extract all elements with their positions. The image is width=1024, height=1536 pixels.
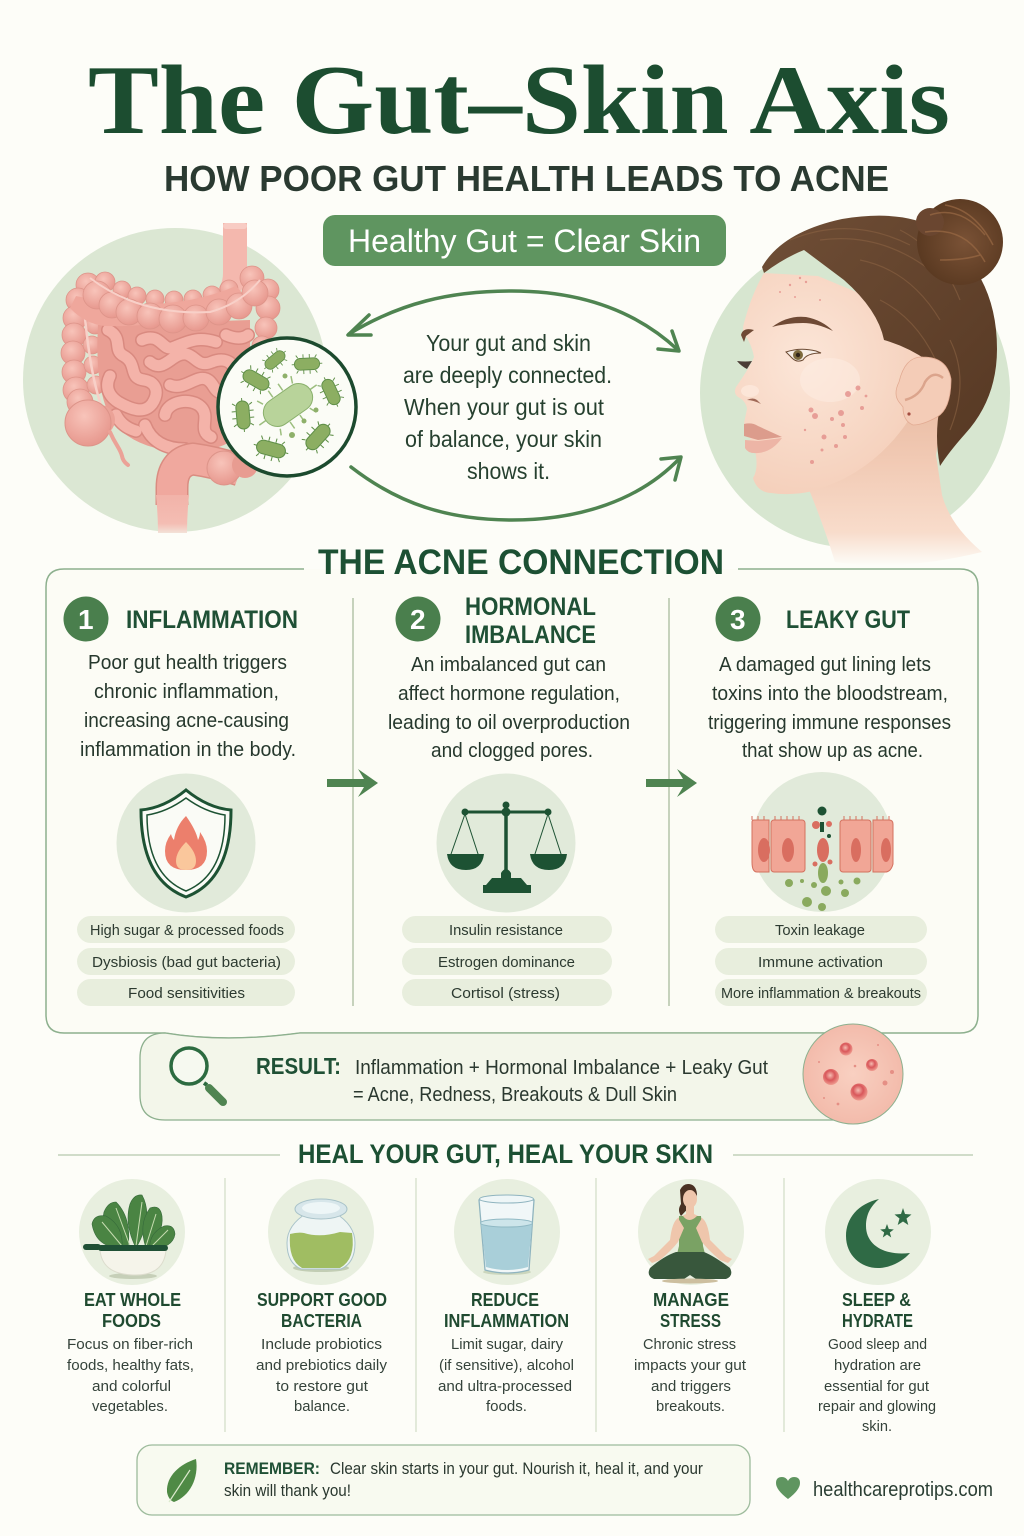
- tip: reduce inflammation: foods.: [486, 1398, 527, 1415]
- column 3: leaky gut: that show up as acne.: [742, 740, 923, 762]
- tip: support good bacteria: [256, 1179, 387, 1415]
- column 3: leaky gut: Toxin leakage: [775, 922, 865, 939]
- column 3: leaky gut: Immune activation: [758, 954, 883, 971]
- tip: manage stress: STRESS: [660, 1311, 721, 1331]
- connection text: of balance, your skin: [405, 426, 602, 452]
- tip: support good bacteria: BACTERIA: [281, 1311, 362, 1331]
- column 2: hormonal imbalance: Insulin resistance: [449, 922, 563, 939]
- column 2: hormonal imbalance: leading to oil overproduction: [388, 712, 630, 734]
- badge: healthy gut equals clear skin: [323, 215, 726, 266]
- column 3: leaky gut: LEAKY GUT: [786, 606, 910, 634]
- tip: eat whole foods: vegetables.: [92, 1398, 168, 1415]
- icon: magnifying glass: [171, 1048, 223, 1102]
- tip: support good bacteria: to restore gut: [276, 1378, 369, 1395]
- tip: sleep and hydrate: hydration are: [834, 1357, 921, 1374]
- connection text: [403, 330, 612, 484]
- tip: manage stress: breakouts.: [656, 1398, 725, 1415]
- column 3: leaky gut: [708, 596, 951, 1006]
- column 2: hormonal imbalance: 2: [410, 604, 426, 635]
- tip: eat whole foods: [67, 1179, 194, 1415]
- connection text: shows it.: [467, 458, 550, 484]
- callout: remember: REMEMBER:: [224, 1459, 320, 1478]
- tip: support good bacteria: SUPPORT GOOD: [257, 1290, 387, 1310]
- connection text: are deeply connected.: [403, 362, 612, 388]
- column 1: inflammation: High sugar & processed foods: [90, 922, 284, 939]
- column 3: leaky gut: More inflammation & breakouts: [721, 985, 921, 1002]
- column 1: inflammation: Poor gut health triggers: [88, 652, 287, 674]
- callout: remember: [137, 1445, 750, 1515]
- icon: leaf: [167, 1459, 197, 1502]
- column 3: leaky gut: triggering immune responses: [708, 712, 951, 734]
- column 2: hormonal imbalance: Estrogen dominance: [438, 954, 575, 971]
- tip: eat whole foods: FOODS: [102, 1311, 161, 1331]
- tip: sleep and hydrate: HYDRATE: [842, 1311, 913, 1331]
- tip: sleep and hydrate: essential for gut: [824, 1378, 930, 1395]
- tip: manage stress: MANAGE: [653, 1290, 729, 1310]
- tip: reduce inflammation: (if sensitive), alcohol: [439, 1357, 574, 1374]
- illustration: woman's face in profile with acne: [700, 199, 1010, 565]
- tip: sleep and hydrate: Good sleep and: [828, 1336, 927, 1353]
- column 3: leaky gut: 3: [730, 604, 746, 635]
- subtitle: HOW POOR GUT HEALTH LEADS TO ACNE: [164, 158, 889, 199]
- icon: probiotic jar: [287, 1199, 355, 1272]
- column 1: inflammation: 1: [78, 604, 94, 635]
- title: The Gut–Skin Axis: [88, 46, 950, 155]
- arrow: bottom curved: [351, 457, 681, 520]
- callout: remember: Clear skin starts in your gut. Nourish it, heal it, and your: [330, 1459, 703, 1478]
- tip: eat whole foods: Focus on fiber-rich: [67, 1336, 193, 1353]
- icon: skin with pimples: [803, 1024, 903, 1124]
- section heading: the acne connection: THE ACNE CONNECTION: [318, 543, 724, 582]
- tip: sleep and hydrate: skin.: [862, 1418, 892, 1435]
- illustration: digestive tract with bacteria: [23, 223, 356, 533]
- icon: moon and stars: [846, 1199, 912, 1268]
- tip: support good bacteria: balance.: [294, 1398, 350, 1415]
- icon: leafy greens in bowl: [83, 1195, 175, 1279]
- tip: sleep and hydrate: [818, 1179, 936, 1435]
- column 1: inflammation: Food sensitivities: [128, 985, 245, 1002]
- tip: eat whole foods: EAT WHOLE: [84, 1290, 181, 1310]
- tip: support good bacteria: and prebiotics daily: [256, 1357, 387, 1374]
- column 1: inflammation: inflammation in the body.: [80, 739, 296, 761]
- tip: sleep and hydrate: repair and glowing: [818, 1398, 936, 1415]
- panel: acne connection: [46, 569, 978, 1038]
- callout: result: Inflammation + Hormonal Imbalance + Leaky Gut: [355, 1057, 768, 1079]
- tip: manage stress: [634, 1179, 747, 1415]
- tip: reduce inflammation: Limit sugar, dairy: [451, 1336, 563, 1353]
- column 2: hormonal imbalance: IMBALANCE: [465, 621, 596, 649]
- section heading: heal your gut: HEAL YOUR GUT, HEAL YOUR SKIN: [298, 1139, 713, 1169]
- column 2: hormonal imbalance: An imbalanced gut can: [411, 654, 606, 676]
- column 3: leaky gut: toxins into the bloodstream,: [712, 683, 948, 705]
- icon: meditating woman: [648, 1184, 732, 1284]
- tip: support good bacteria: Include probiotics: [261, 1336, 382, 1353]
- tip: reduce inflammation: and ultra-processed: [438, 1378, 572, 1395]
- callout: result: [140, 1024, 903, 1124]
- column 1: inflammation: INFLAMMATION: [126, 606, 298, 634]
- tip: manage stress: impacts your gut: [634, 1357, 747, 1374]
- callout: result: RESULT:: [256, 1053, 341, 1079]
- column 2: hormonal imbalance: [388, 593, 630, 1006]
- column 1: inflammation: Dysbiosis (bad gut bacteria): [92, 954, 281, 971]
- badge: healthy gut equals clear skin: Healthy Gut = Clear Skin: [348, 223, 701, 259]
- website: healthcareprotips.com: [813, 1479, 993, 1501]
- tip: manage stress: and triggers: [651, 1378, 731, 1395]
- tip: reduce inflammation: REDUCE: [471, 1290, 539, 1310]
- column 2: hormonal imbalance: and clogged pores.: [431, 740, 593, 762]
- connection text: Your gut and skin: [426, 330, 591, 356]
- column 1: inflammation: increasing acne-causing: [84, 710, 289, 732]
- column 2: hormonal imbalance: affect hormone regulation,: [398, 683, 620, 705]
- column 2: hormonal imbalance: Cortisol (stress): [451, 985, 560, 1002]
- icon: heart: [776, 1477, 800, 1499]
- arrow: step 2 to 3: [646, 769, 697, 797]
- arrow: step 1 to 2: [327, 769, 378, 797]
- tip: sleep and hydrate: SLEEP &: [842, 1290, 911, 1310]
- column 3: leaky gut: A damaged gut lining lets: [719, 654, 931, 676]
- connection text: When your gut is out: [404, 394, 605, 420]
- callout: result: = Acne, Redness, Breakouts & Dull Skin: [353, 1084, 677, 1106]
- tip: reduce inflammation: [438, 1179, 574, 1415]
- column 1: inflammation: chronic inflammation,: [94, 681, 279, 703]
- tip: eat whole foods: and colorful: [92, 1378, 171, 1395]
- column 2: hormonal imbalance: HORMONAL: [465, 593, 596, 621]
- callout: remember: skin will thank you!: [224, 1481, 351, 1500]
- tip: reduce inflammation: INFLAMMATION: [444, 1311, 569, 1331]
- arrow: top curved: [348, 291, 679, 351]
- icon: glass of water: [479, 1195, 534, 1275]
- column 1: inflammation: [64, 596, 298, 1006]
- tip: eat whole foods: foods, healthy fats,: [67, 1357, 194, 1374]
- tip: manage stress: Chronic stress: [643, 1336, 736, 1353]
